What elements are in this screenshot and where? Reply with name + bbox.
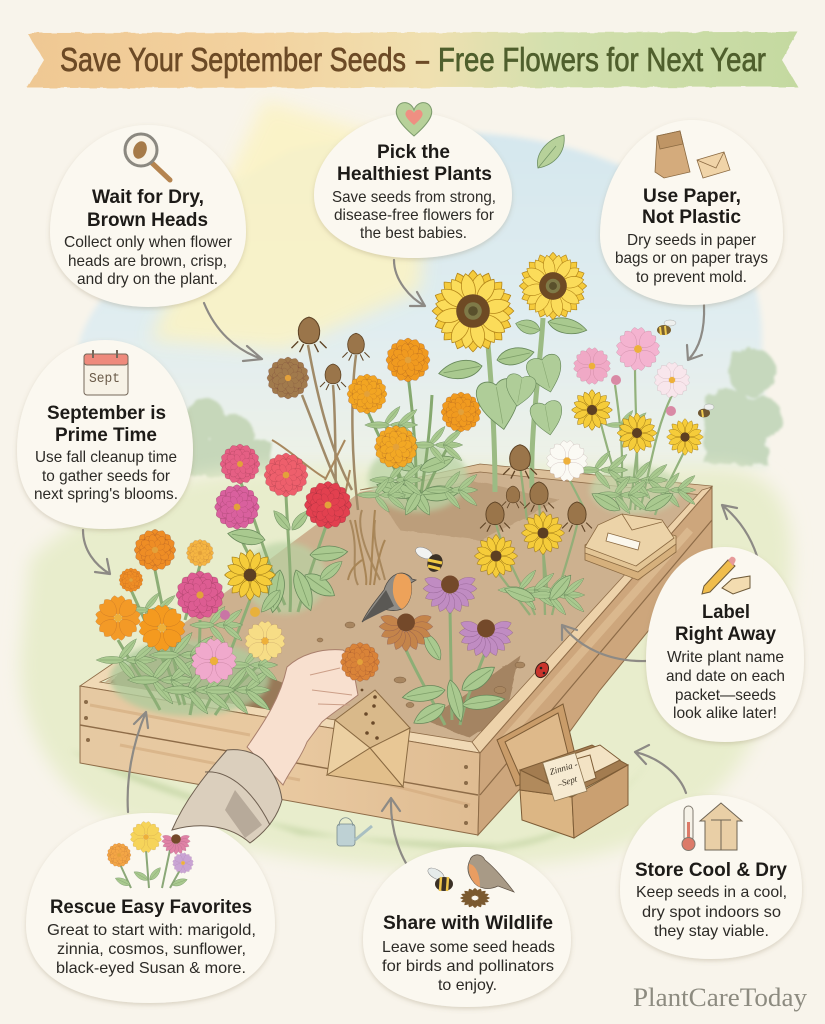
body text: look alike later!: [673, 705, 777, 722]
sun rays: [150, 100, 430, 350]
body text: to prevent mold.: [636, 269, 747, 286]
ladybug: [533, 660, 551, 680]
sleeve: [172, 750, 282, 843]
bee upper: [657, 320, 676, 335]
heading: September is: [47, 402, 166, 424]
plant: coneflowers: [379, 575, 513, 729]
icon: paper bag and envelope: [655, 131, 730, 178]
body text: Use fall cleanup time: [35, 449, 177, 466]
heading: Prime Time: [55, 424, 157, 446]
body text: [34, 449, 178, 503]
heading: Share with Wildlife: [383, 912, 553, 934]
body text: to enjoy.: [438, 977, 497, 994]
plant: front left flower cluster: [86, 512, 295, 716]
arrow: rescue to flowers: [128, 712, 148, 812]
icon: flower bouquet: [97, 815, 198, 888]
body text: Dry seeds in paper: [627, 232, 756, 249]
panel: pick the healthiest plants: [314, 103, 512, 258]
body text: [666, 649, 785, 722]
logo: PlantCareToday: PlantCareToday: [633, 983, 807, 1012]
body text: Great to start with: marigold,: [47, 922, 256, 939]
body text: and dry on the plant.: [77, 271, 218, 288]
body text: [64, 234, 232, 288]
body text: Keep seeds in a cool,: [636, 884, 787, 901]
heading: Brown Heads: [87, 209, 208, 231]
arrow: september to flowers: [83, 530, 110, 574]
heading: Label: [702, 601, 750, 623]
title: –: [416, 41, 429, 78]
body text: [615, 232, 768, 286]
bee right: [698, 404, 714, 417]
icon: calendar: Sept: [89, 371, 120, 387]
heading: Use Paper,: [643, 185, 741, 207]
heading: Rescue Easy Favorites: [50, 896, 252, 918]
bird: [362, 573, 416, 622]
body text: and date on each: [666, 668, 785, 685]
panel: september is prime time: [17, 340, 193, 529]
packet label in box: [543, 753, 587, 801]
body text: [332, 189, 496, 242]
heading: Store Cool & Dry: [635, 859, 787, 881]
heading: Healthiest Plants: [337, 163, 492, 185]
body text: [382, 939, 555, 994]
heading: Pick the: [377, 141, 450, 163]
sky wash: [75, 132, 768, 470]
body text: disease-free flowers for: [334, 207, 494, 224]
arrow: wait to seed heads: [204, 303, 262, 361]
title banner: [27, 32, 798, 88]
arrows: [83, 260, 757, 880]
body text: black-eyed Susan & more.: [56, 960, 246, 977]
body text: to gather seeds for: [42, 468, 170, 485]
seed packet stack: [585, 514, 676, 580]
panel: label right away: [646, 547, 804, 742]
floating leaf: [537, 135, 564, 168]
arrow: paper to bed: [687, 305, 704, 360]
packet label in box: Zinnia -: [548, 759, 579, 777]
heading: Right Away: [675, 623, 776, 645]
body text: Leave some seed heads: [382, 939, 555, 956]
arrow: label to packets: [722, 505, 757, 556]
bee centre: [414, 545, 445, 574]
panel: rescue easy favorites: [26, 813, 275, 1003]
arrow: pick to sunflower: [394, 260, 425, 306]
background trees left: [174, 398, 270, 476]
heading: [337, 141, 492, 185]
heading: [47, 402, 166, 446]
plant: cosmos and black-eyed Susans: [538, 318, 717, 515]
envelope with seeds: [327, 689, 410, 787]
body text: they stay viable.: [654, 923, 769, 940]
title: Free Flowers for Next Year: [438, 41, 766, 78]
body text: bags or on paper trays: [615, 250, 768, 267]
icon: thermometer and shed: [682, 803, 742, 850]
heading: [675, 601, 776, 645]
icon: pencil and tag: [702, 557, 750, 594]
arrow: share to envelope: [382, 798, 418, 880]
body text: Write plant name: [667, 649, 784, 666]
plant: sunflowers: [391, 218, 621, 492]
panel: store cool and dry: [620, 795, 802, 959]
body text: dry spot indoors so: [642, 904, 781, 921]
packet label in box: –Sept: [555, 774, 579, 789]
panel: wait for dry brown heads: [50, 125, 246, 307]
plant: black-eyed Susans and seed heads centre right: [458, 445, 592, 617]
icon: magnifier: [125, 134, 170, 180]
body text: Save seeds from strong,: [332, 189, 496, 206]
plant: marigolds: [330, 319, 498, 518]
icon: bee and bird: [426, 855, 514, 916]
raised garden bed: [80, 464, 712, 835]
plant: dry grasses centre: [348, 510, 385, 585]
body text: [47, 922, 256, 977]
body text: [636, 884, 787, 940]
seed pebbles in soil: [316, 588, 525, 708]
panel: use paper not plastic: [600, 120, 783, 305]
plant: zinnias: [196, 427, 372, 616]
watering can: [337, 818, 372, 846]
heading: [87, 186, 208, 231]
background trees right: [704, 348, 782, 464]
body text: the best babies.: [360, 225, 467, 242]
icon: calendar: [84, 350, 128, 395]
body text: for birds and pollinators: [382, 958, 554, 975]
body text: packet—seeds: [675, 687, 776, 704]
hand holding dried flower: [247, 626, 396, 785]
icon: heart: [396, 103, 432, 136]
wooden seed box: [497, 704, 628, 838]
body text: next spring's blooms.: [34, 486, 178, 503]
plant: dried seed heads: [249, 317, 385, 585]
arrow: label to bed: [562, 625, 646, 661]
grass: [20, 468, 792, 869]
body text: zinnia, cosmos, sunflower,: [57, 941, 246, 958]
body text: heads are brown, crisp,: [68, 253, 227, 270]
panel: share with wildlife: [363, 847, 571, 1007]
heading: Wait for Dry,: [92, 186, 204, 208]
body text: Collect only when flower: [64, 234, 232, 251]
heading: [642, 185, 741, 228]
heading: Not Plastic: [642, 206, 741, 228]
arrow: store to box: [635, 745, 686, 793]
title: Save Your September Seeds: [60, 41, 406, 78]
